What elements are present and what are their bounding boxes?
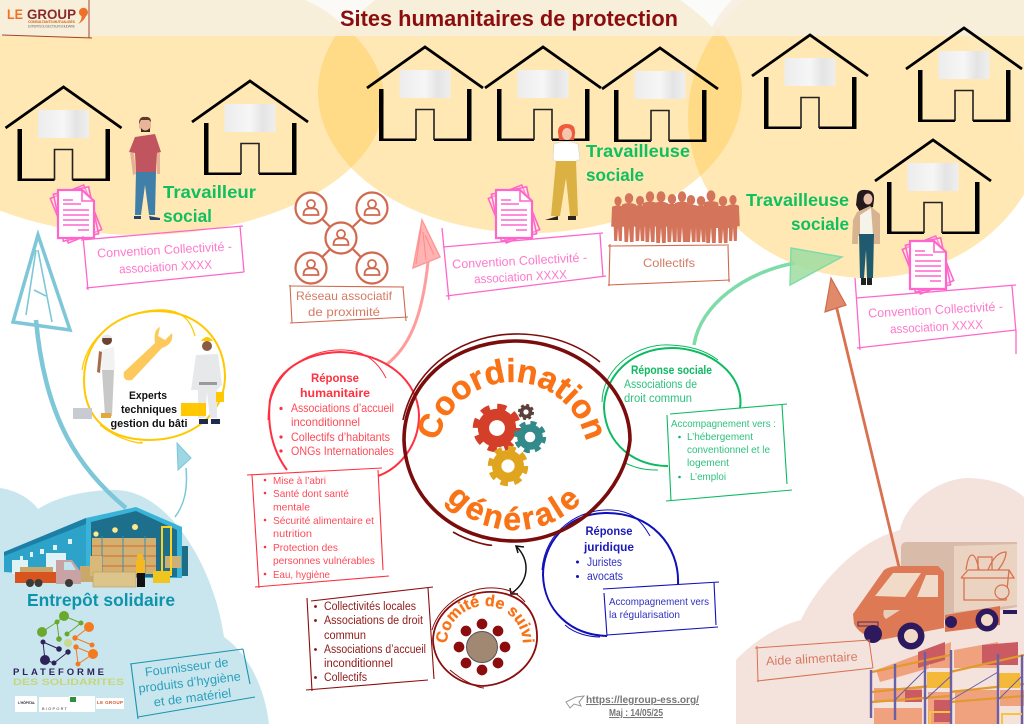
illustration: delivery truck — [853, 542, 1017, 650]
circle: comite de suivi — [432, 587, 538, 688]
callout: humanitarian list: personnes vulnérables — [273, 555, 375, 567]
circle: reponse humanitaire: humanitaire — [300, 386, 370, 400]
circle: reponse humanitaire: ONGs Internationales — [291, 444, 394, 458]
icon: wrench — [124, 327, 172, 380]
icon: yellow toolbox — [181, 392, 224, 416]
circle: coordination generale — [402, 333, 632, 546]
arrow: coordination to comite — [510, 546, 526, 594]
logo: plateforme des solidarites: DES SOLIDARITES — [13, 677, 124, 688]
text: comite de suivi: Comité de suivi — [436, 594, 535, 642]
callout: convention 1 — [81, 226, 244, 290]
callout: comite list: commun — [324, 630, 366, 642]
callout: aide alimentaire — [755, 640, 873, 682]
house 4 — [485, 47, 601, 141]
callout: humanitarian list: Mise à l’abri — [273, 475, 326, 487]
logo: plateforme des solidarites: PLATEFORME — [13, 667, 104, 678]
callout: humanitarian list — [247, 468, 389, 588]
footer: website and date — [566, 694, 699, 719]
callout: social list: Accompagnement vers : — [671, 418, 776, 430]
text: Coordination: Coordination — [418, 358, 602, 440]
footer: website and date: https://legroup-ess.org/ — [586, 694, 699, 706]
circle: reponse humanitaire: Associations d’accueil — [291, 401, 394, 415]
logo: Le Group — [2, 0, 92, 38]
icon: documents 3 — [902, 236, 954, 294]
person: social worker woman centre — [545, 124, 580, 220]
circle: reponse humanitaire: Réponse — [311, 371, 359, 385]
callout: convention 2 — [442, 228, 606, 300]
circle: reponse juridique — [542, 510, 678, 637]
label: Travailleuse sociale centre — [586, 141, 690, 185]
circle: reponse juridique: juridique — [583, 540, 634, 554]
text: experts: techniques — [121, 404, 177, 416]
circle: reponse humanitaire: inconditionnel — [291, 415, 360, 429]
house 5 — [602, 48, 718, 142]
callout: social list — [666, 404, 792, 501]
logos: partners: BIOPORT — [42, 707, 68, 711]
circle: reponse sociale — [602, 345, 740, 470]
label: entrepot solidaire: Entrepôt solidaire — [27, 590, 175, 610]
logo: plateforme des solidarites — [13, 611, 124, 688]
circle: reponse sociale: Associations de — [624, 379, 697, 391]
icon: grey toolbox — [73, 408, 92, 419]
house 2 — [192, 81, 308, 175]
callout: humanitarian list: nutrition — [273, 528, 312, 540]
circle: reponse juridique: Juristes — [587, 557, 622, 569]
circle: experts techniques — [73, 310, 225, 443]
label: Travailleuse sociale right: Travailleuse — [746, 190, 849, 210]
circle: reponse juridique: Réponse — [586, 524, 633, 538]
title: Sites humanitaires de protection — [340, 6, 678, 31]
callout: humanitarian list: Eau, hygiène — [273, 569, 330, 581]
house 6 — [752, 35, 868, 129]
callout: comite list: Associations d’accueil — [324, 644, 426, 656]
logos: partners: L’HÔPITAL — [18, 700, 36, 705]
circle: reponse humanitaire: Collectifs d’habitants — [291, 430, 390, 444]
circle: reponse humanitaire — [268, 350, 419, 476]
circle: reponse juridique: avocats — [587, 571, 623, 583]
callout: social list: logement — [687, 457, 729, 469]
label: Travailleuse sociale right — [746, 190, 849, 234]
illustration: warehouse — [4, 507, 188, 587]
callout: convention 1: Convention Collectivité - — [97, 239, 232, 261]
circle: reponse sociale: droit commun — [624, 393, 692, 405]
callout: reseau associatif: Réseau associatif — [296, 289, 393, 303]
logos: partners — [15, 696, 124, 712]
icon: woman worker — [97, 334, 115, 418]
callout: humanitarian list: Sécurité alimentaire et — [273, 515, 374, 527]
callout: convention 2: association XXXX — [474, 268, 568, 286]
callout: comite list — [306, 587, 434, 691]
person: social worker woman right — [852, 190, 880, 285]
person: social worker man — [129, 117, 161, 220]
callout: convention 2: Convention Collectivité - — [452, 250, 587, 272]
logo: Le Group: EXPERTS DU SECTEUR SOLIDAIRE — [28, 24, 76, 28]
callout: reseau associatif — [289, 285, 408, 323]
callout: legal list: Accompagnement vers — [609, 596, 709, 608]
icon: round table — [453, 618, 511, 676]
logo: Le Group: CONSULTANTS MUTUALISÉS — [28, 19, 76, 24]
logos: partners: LE GROUP — [97, 700, 123, 705]
callout: humanitarian list: Santé dont santé — [273, 488, 349, 500]
circle: reponse sociale: Réponse sociale — [631, 365, 712, 377]
callout: humanitarian list: mentale — [273, 502, 310, 514]
arrow: food aid to sites — [825, 278, 899, 567]
arrow: warehouse to experts — [175, 443, 191, 517]
arrow: humanitarian to sites — [386, 220, 440, 365]
icon: gears — [477, 405, 543, 483]
text: experts — [110, 390, 188, 430]
background: yellow site zones — [0, 0, 1024, 278]
callout: fournisseur: et de matériel — [153, 686, 232, 709]
label: Travailleur social: Travailleur — [163, 182, 256, 202]
house 7 — [906, 28, 1022, 122]
text: experts: Experts — [129, 390, 167, 402]
callout: social list: conventionnel et le — [687, 444, 770, 456]
callout: convention 3 — [855, 278, 1016, 354]
callout: comite list: Associations de droit — [324, 615, 424, 627]
label: Travailleuse sociale centre: sociale — [586, 165, 644, 185]
logo: Le Group: GROUP — [27, 7, 76, 22]
callout: convention 3: Convention Collectivité - — [868, 299, 1003, 321]
icon: associative network — [296, 192, 388, 284]
callout: comite list: inconditionnel — [324, 658, 393, 670]
callout: social list: L’hébergement — [687, 431, 753, 443]
icon: documents 1 — [50, 185, 102, 243]
callout: legal list: la régularisation — [609, 609, 680, 621]
icon: documents 2 — [488, 185, 540, 243]
callout: fournisseur — [130, 649, 255, 719]
arrow: social to sites — [694, 248, 842, 345]
illustration: shelves — [871, 642, 1024, 724]
callout: collectifs: Collectifs — [643, 256, 695, 270]
background: blue warehouse zone — [0, 488, 269, 724]
callout: legal list — [603, 582, 719, 636]
callout: collectifs — [608, 244, 730, 286]
callout: reseau associatif: de proximité — [308, 305, 380, 319]
house 3 — [367, 47, 483, 141]
label: Travailleuse sociale centre: Travailleuse — [586, 141, 690, 161]
label: Travailleur social — [163, 182, 256, 226]
footer: website and date: Maj : 14/05/25 — [609, 707, 663, 719]
callout: comite list: Collectifs — [324, 672, 367, 684]
icon: man worker — [191, 337, 222, 424]
callout: fournisseur: Fournisseur de — [144, 655, 229, 679]
background: pink food aid zone — [736, 478, 1024, 724]
house 8 — [875, 140, 991, 234]
callout: social list: L’emploi — [690, 471, 726, 483]
text: experts: gestion du bâti — [110, 418, 188, 430]
label: Travailleuse sociale right: sociale — [791, 214, 849, 234]
callout: fournisseur: produits d’hygiène — [138, 669, 242, 696]
label: Travailleur social: social — [163, 206, 212, 226]
callout: convention 1: association XXXX — [119, 258, 213, 276]
arrow: warehouse to top left — [13, 235, 126, 508]
callout: comite list: Collectivités locales — [324, 601, 416, 613]
text: generale: générale — [444, 490, 579, 531]
callout: convention 3: association XXXX — [890, 318, 984, 336]
callout: humanitarian list: Protection des — [273, 542, 338, 554]
icon: collectifs silhouettes — [611, 190, 740, 243]
house 1 — [6, 87, 122, 181]
callout: aide alimentaire: Aide alimentaire — [765, 650, 858, 668]
logo: Le Group: LE — [7, 7, 23, 22]
